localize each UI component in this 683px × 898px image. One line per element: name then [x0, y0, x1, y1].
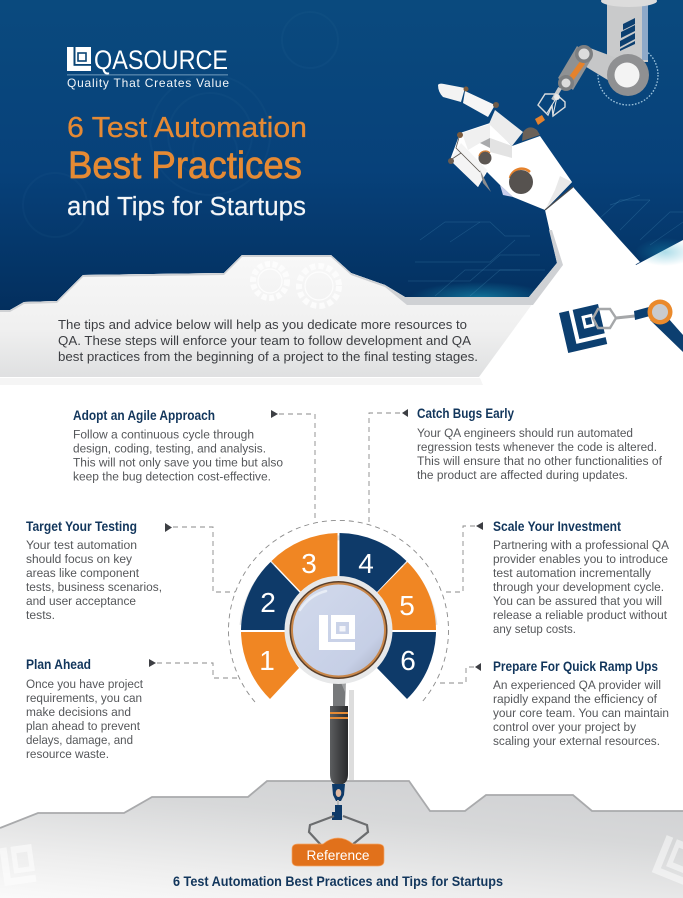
tip: plan ahead: make decisions and [26, 705, 131, 719]
bottom floor [0, 781, 683, 898]
connector: adopt [271, 410, 315, 522]
segment 6: 6 [400, 645, 416, 676]
tip: target your testing: areas like component [26, 566, 140, 580]
intro panel [0, 230, 583, 385]
intro text: best practices from the beginning of a project to the final testing stages. [58, 349, 478, 364]
tip: plan ahead: requirements, you can [26, 691, 142, 705]
tip: scale your investment: provider enables you to introduce [493, 552, 668, 566]
tip: prepare for quick ramp ups: your core team. You can maintain [493, 706, 669, 720]
tip: adopt an agile approach: design, coding, testing, and analysis. [73, 442, 266, 456]
tip: prepare for quick ramp ups: rapidly expand the efficiency of [493, 692, 658, 706]
tip: prepare for quick ramp ups [493, 659, 669, 748]
segment 5: 5 [399, 590, 415, 621]
tip: adopt an agile approach: Adopt an Agile Approach [73, 408, 215, 423]
tip: scale your investment: You can be assured that you will [493, 594, 662, 608]
reference button [292, 838, 384, 866]
tip: plan ahead: delays, damage, and [26, 733, 133, 747]
title: and Tips for Startups [67, 193, 306, 221]
logo and tagline: QASOURCE [94, 45, 228, 75]
segment 4: 4 [358, 548, 374, 579]
tip: plan ahead: resource waste. [26, 747, 109, 761]
tip: adopt an agile approach: Follow a continuous cycle through [73, 428, 254, 442]
segment 2: 2 [260, 587, 276, 618]
watermark logo left [0, 844, 36, 886]
connector: target [165, 523, 235, 592]
reference caption: 6 Test Automation Best Practices and Tips for Startups [173, 873, 503, 889]
tip: catch bugs early: Your QA engineers should run automated [417, 426, 633, 440]
logo and tagline: Quality That Creates Value [67, 76, 229, 90]
segment 1 [241, 632, 299, 699]
tip: plan ahead: Plan Ahead [26, 657, 91, 672]
segment 4 [340, 533, 406, 592]
tip: catch bugs early: Catch Bugs Early [417, 406, 514, 421]
tip: target your testing: Target Your Testing [26, 519, 137, 534]
tip: target your testing: tests. [26, 608, 55, 622]
segment 3 [272, 533, 338, 592]
tip: target your testing: Your test automation [26, 538, 137, 552]
lens logo [319, 615, 355, 650]
tip: scale your investment: release a reliable product without [493, 608, 668, 622]
tip: plan ahead [26, 657, 144, 761]
magnifying glass [284, 576, 392, 784]
tip: prepare for quick ramp ups: scaling your external resources. [493, 734, 660, 748]
tip: target your testing [26, 519, 162, 622]
robot claw [309, 784, 368, 845]
tip: adopt an agile approach: keep the bug detection cost-effective. [73, 470, 271, 484]
tip: scale your investment: Partnering with a professional QA [493, 538, 670, 552]
tip: scale your investment: test automation incrementally [493, 566, 652, 580]
segment 3: 3 [301, 548, 317, 579]
tip: scale your investment [493, 519, 670, 636]
segment 5 [377, 562, 436, 630]
intro text: QA. These steps will enforce your team to follow development and QA [58, 333, 471, 348]
small robot arm with logo [559, 300, 683, 353]
robot hand [438, 84, 640, 290]
tip: scale your investment: any setup costs. [493, 622, 576, 636]
tip: prepare for quick ramp ups: control over your project by [493, 720, 637, 734]
robot arm top right [535, 0, 658, 125]
tip: target your testing: and user acceptance [26, 594, 136, 608]
tip: prepare for quick ramp ups: An experienced QA provider will [493, 678, 661, 692]
watermark logo right [652, 835, 683, 886]
segment 2 [241, 562, 300, 630]
title: Best Practices [68, 145, 302, 187]
tip: scale your investment: Scale Your Investment [493, 519, 621, 534]
tip: prepare for quick ramp ups: Prepare For Quick Ramp Ups [493, 659, 658, 674]
segment 6 [377, 632, 436, 699]
tip: scale your investment: through your development cycle. [493, 580, 664, 594]
connector: scale [443, 522, 483, 592]
tip: catch bugs early: regression tests whenever the code is altered. [417, 440, 657, 454]
tip: adopt an agile approach: This will not only save you time but also [73, 456, 283, 470]
tip: plan ahead: plan ahead to prevent [26, 719, 141, 733]
segment 1: 1 [259, 645, 275, 676]
title [67, 112, 307, 221]
intro text [58, 317, 478, 364]
title: 6 Test Automation [67, 112, 307, 144]
reference button: Reference [306, 847, 370, 863]
tip: plan ahead: Once you have project [26, 677, 144, 691]
gears [253, 264, 339, 306]
connector: catch [369, 409, 408, 522]
header background [0, 0, 683, 314]
intro text: The tips and advice below will help as you dedicate more resources to [58, 317, 467, 332]
tip: target your testing: tests, business scenarios, [26, 580, 162, 594]
tip: catch bugs early: This will ensure that no other functionalities of [417, 454, 663, 468]
tip: target your testing: should focus on key [26, 552, 133, 566]
connector: plan [149, 659, 240, 678]
tip: adopt an agile approach [73, 408, 283, 484]
numbered wheel [228, 520, 448, 702]
tip: catch bugs early [417, 406, 663, 482]
logo and tagline [67, 45, 229, 90]
connector: prepare [436, 663, 481, 683]
tip: catch bugs early: the product are affected during updates. [417, 468, 628, 482]
